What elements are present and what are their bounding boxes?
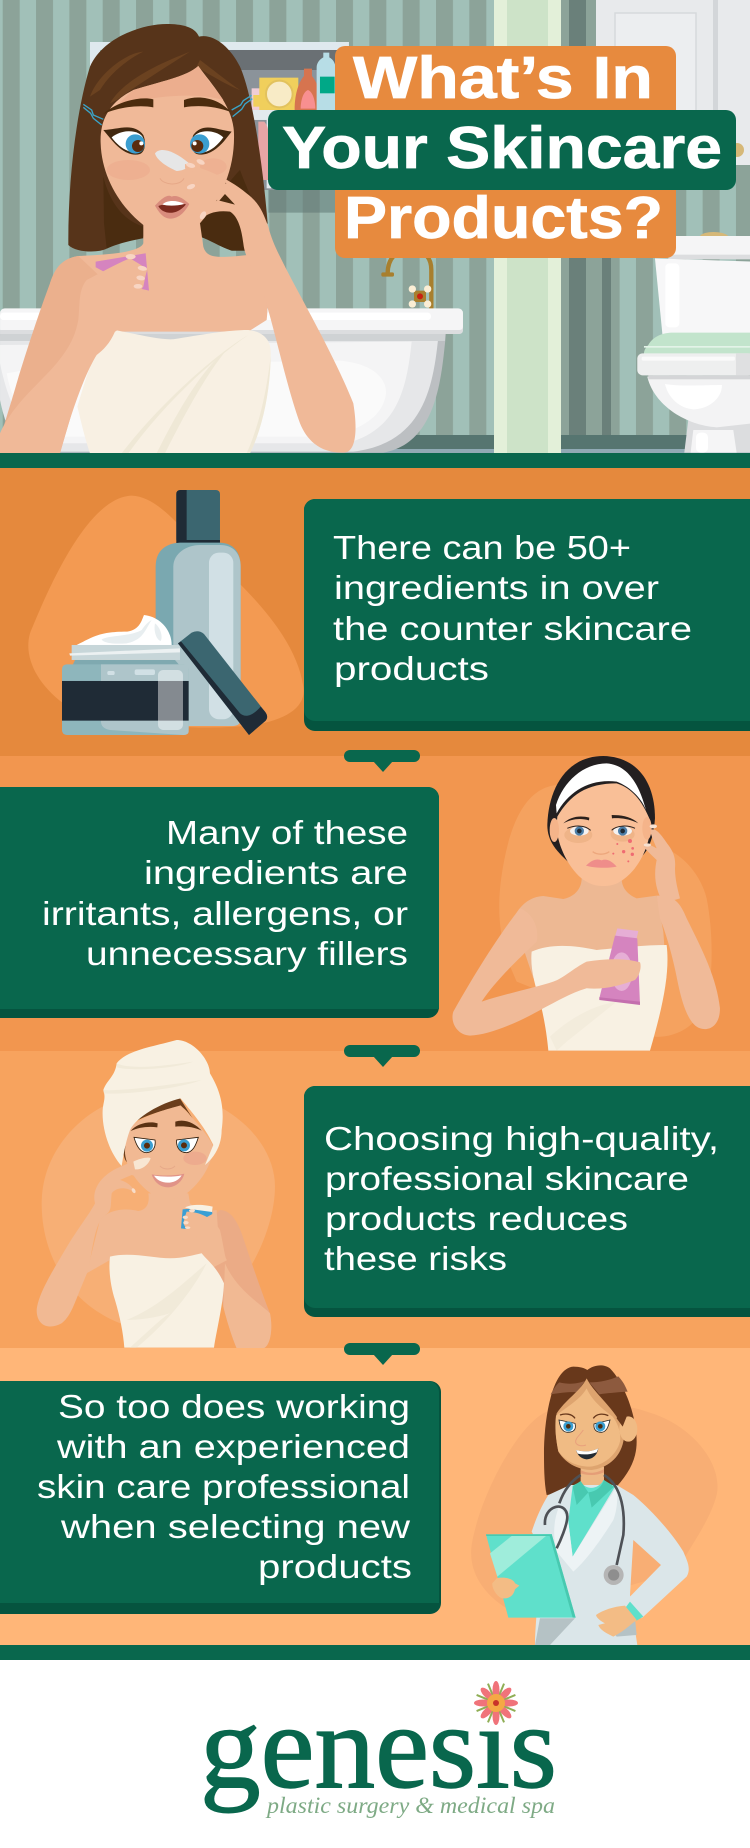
title orange backing [335, 46, 676, 258]
mouth [155, 196, 189, 219]
logo flower [469, 1676, 523, 1730]
box 1 text [333, 529, 692, 687]
box 1 text: products [334, 650, 489, 687]
nose and mouth [576, 1430, 598, 1459]
left shoulder arm [0, 256, 127, 453]
stethoscope [545, 1475, 624, 1585]
panel: section 2 [0, 756, 750, 1051]
box 3 text: these risks [324, 1240, 507, 1277]
brows and eyes [131, 1121, 202, 1153]
box 2 text: irritants, allergens, or [42, 895, 408, 932]
neck and chest [87, 1193, 220, 1273]
neck and chest [50, 223, 267, 332]
box 3 text: products reduces [325, 1200, 628, 1237]
panel: hero bathroom scene [0, 0, 750, 468]
toilet [637, 232, 750, 453]
logo wordmark: genesis [200, 1680, 557, 1813]
skirting board [0, 435, 750, 453]
cover for the letter i dot behind the flower [470, 1682, 522, 1729]
illustration: woman with acne [452, 756, 720, 1051]
hair [547, 756, 655, 865]
box 2 text [42, 814, 408, 972]
tube in hand [96, 253, 149, 291]
box 4 text: with an experienced [56, 1428, 410, 1465]
title line 3: Products? [344, 185, 663, 251]
box 1 text: the counter skincare [333, 610, 692, 647]
pillar [494, 0, 561, 453]
illustration: woman in head towel [37, 1040, 275, 1348]
hair [68, 24, 268, 252]
bottom green band [0, 1645, 750, 1660]
cream [77, 615, 172, 645]
blob [471, 1404, 718, 1608]
bottle cap [176, 490, 220, 543]
title line 2: Your Skincare [282, 115, 722, 181]
text box 3 [304, 1086, 750, 1317]
panel: section 1 [0, 468, 750, 756]
shelf bottles [252, 53, 335, 180]
mouth and nose [152, 1166, 184, 1187]
shirt [568, 1480, 615, 1557]
box 1 text: ingredients in over [334, 569, 659, 606]
text box 1 [304, 499, 750, 731]
box 2 text: Many of these [166, 814, 408, 851]
box 2 text: ingredients are [144, 854, 408, 891]
illustration: doctor with clipboard [471, 1365, 718, 1645]
jar lid [178, 631, 267, 735]
box 4 text: products [258, 1548, 412, 1585]
forearm and hand holding tube [0, 254, 147, 453]
under-eye circles [564, 827, 635, 843]
striped wallpaper [0, 0, 750, 453]
box 4 text [37, 1388, 412, 1585]
bathtub [0, 308, 463, 453]
jar [62, 645, 189, 735]
box 4 text: when selecting new [60, 1508, 410, 1545]
lab coat [532, 1485, 689, 1645]
eyes [559, 1414, 610, 1432]
box 3 text: Choosing high-quality, [324, 1120, 719, 1157]
jar and hand [181, 1205, 227, 1268]
section 2 background [0, 756, 750, 1051]
acne spots [612, 839, 634, 862]
eyes [103, 127, 232, 155]
text box 2 [0, 787, 439, 1018]
raised hand [643, 824, 680, 901]
face [555, 1378, 637, 1475]
blob [28, 496, 304, 728]
head towel [103, 1040, 223, 1166]
headband and face [550, 763, 652, 886]
bottle body [156, 543, 241, 726]
box 3 text [324, 1120, 719, 1277]
right arm [657, 896, 720, 1029]
arm with hand [452, 908, 641, 1036]
coat lapel [554, 1487, 617, 1572]
panel: section 3 [0, 1040, 750, 1348]
hair [544, 1365, 637, 1495]
eyebrows [103, 98, 231, 114]
logo: genesis [200, 1676, 557, 1818]
connector arrow 1 [344, 750, 420, 772]
clipboard [486, 1534, 576, 1618]
bottom band of hero [0, 453, 750, 468]
nose and mouth [586, 852, 617, 868]
neck and chest [513, 878, 667, 978]
towel [77, 330, 271, 453]
nose cream [155, 150, 189, 171]
far arm [200, 1210, 271, 1348]
box 4 text: So too does working [58, 1388, 410, 1425]
illustration: bottle and cream jar [28, 490, 304, 735]
section 1 background [0, 468, 750, 756]
near arm [37, 1158, 150, 1327]
neck [581, 1467, 604, 1488]
title green backing [268, 110, 736, 190]
bobby pins [83, 95, 252, 125]
box 4 text: skin care professional [37, 1468, 410, 1505]
blob [42, 1092, 275, 1323]
medicine cabinet [90, 42, 352, 213]
connector arrow 3 [344, 1343, 420, 1365]
nose [160, 178, 184, 184]
door [596, 0, 750, 165]
panel: section 4 [0, 1348, 750, 1645]
text box 4 [0, 1381, 441, 1614]
clipboard hand [492, 1578, 519, 1598]
section 4 background [0, 1348, 750, 1645]
faucet [381, 249, 431, 310]
hair [124, 1098, 200, 1163]
box 1 text: There can be 50+ [333, 529, 631, 566]
blob [499, 785, 712, 1037]
face [125, 1105, 213, 1199]
towel [531, 945, 667, 1051]
cream on cheek [133, 1158, 151, 1169]
arm and hand to nose [185, 158, 356, 453]
connector arrow 2 [344, 1045, 420, 1067]
hip hand and cuff [596, 1602, 643, 1637]
section 3 background [0, 1051, 750, 1348]
box 2 text: unnecessary fillers [86, 935, 408, 972]
face [101, 66, 234, 235]
tube [599, 928, 640, 1005]
title line 1: What’s In [353, 45, 653, 111]
eyes and brows [563, 815, 638, 836]
wall shadow stripes [561, 0, 619, 453]
title [268, 45, 736, 258]
illustration: woman applying nose cream [0, 24, 356, 453]
logo tagline: plastic surgery & medical spa [265, 1793, 555, 1818]
towel [109, 1253, 224, 1348]
box 3 text: professional skincare [325, 1160, 689, 1197]
